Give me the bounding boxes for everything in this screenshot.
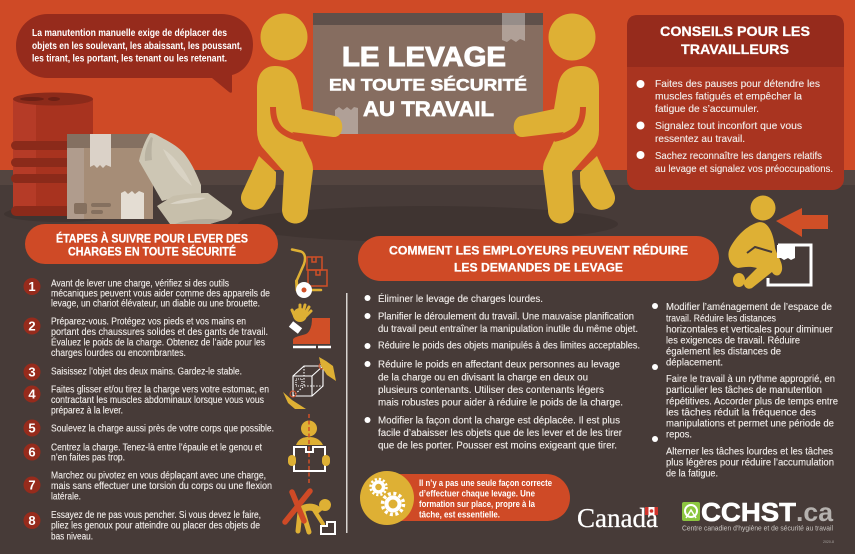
step 1: [24, 278, 270, 310]
employer measures: middle column: Modifier la façon dont la charge est déplacée. Il est plus: [378, 416, 620, 426]
employer measures: right column: Modifier l’aménagement de l’espace de: [666, 302, 832, 313]
section heading: safe lifting steps: ÉTAPES À SUIVRE POUR LEVER DES: [56, 232, 248, 246]
icon: gears: [370, 479, 404, 514]
intro speech bubble: [16, 14, 253, 93]
step 5: [24, 420, 274, 436]
intro speech bubble: les tirant, les portant, les tenant ou les retenant.: [32, 54, 227, 64]
step 5: Soulevez la charge aussi près de votre corps que possible.: [51, 424, 274, 434]
steps list: [24, 278, 274, 542]
title: [329, 41, 527, 121]
step 3: Saisissez l’objet des deux mains. Gardez-le stable.: [51, 366, 242, 378]
icon: do not bend: [285, 491, 335, 534]
callout: on-site training: tâche, est essentielle.: [419, 510, 500, 520]
logo: CCHST: Centre canadien d’hygiène et de sécurité au travail: [682, 524, 833, 532]
section heading: safe lifting steps: [25, 224, 278, 264]
step 6: n’en faites pas trop.: [51, 452, 125, 464]
panel: worker tips: Sachez reconnaître les dangers relatifs: [655, 151, 822, 162]
section heading: employers: [358, 236, 719, 281]
icon: sacks: [139, 133, 232, 224]
logo: Canada wordmark: Canada: [577, 503, 658, 533]
icon: box with two hands: [283, 357, 336, 409]
employer measures: middle column: du travail peut entraîner la manipulation inutile du même objet.: [378, 324, 638, 335]
callout: on-site training: formation sur place, propre à la: [419, 499, 536, 509]
panel: worker tips: [627, 15, 844, 190]
step 7: latérale.: [51, 492, 81, 502]
step 3: 3: [28, 364, 36, 380]
employer measures: middle column: Éliminer le levage de charges lourdes.: [378, 292, 543, 305]
step 8: 8: [28, 513, 36, 528]
step 4: [24, 384, 269, 416]
employer measures: right column: manipulations et permet une période de: [666, 418, 834, 430]
figure: right worker: [514, 14, 615, 224]
employer measures: right column: les tâches réduit la fréquence des: [666, 408, 816, 418]
step 1: levage, un chariot élévateur, un diable ou une brouette.: [51, 298, 260, 310]
step 1: Avant de lever une charge, vérifiez si des outils: [51, 278, 229, 290]
section heading: employers: LES DEMANDES DE LEVAGE: [454, 260, 623, 274]
panel: worker tips: fatigue de s’accumuler.: [655, 104, 759, 115]
figure: left worker: [241, 14, 342, 224]
icon: red barrel: [11, 92, 95, 216]
logo: CCHST: [682, 497, 834, 532]
employer measures: middle column: Planifier le déroulement du travail. Une mauvaise planification: [378, 312, 634, 322]
intro speech bubble: La manutention manuelle exige de déplacer des: [32, 28, 227, 39]
step 7: 7: [28, 478, 36, 492]
step 8: bas niveau.: [51, 532, 93, 542]
step 6: Centrez la charge. Tenez-là entre l’épaule et le genou et: [51, 442, 262, 454]
employer measures: middle column: [364, 292, 640, 452]
icon: hand truck: [292, 250, 327, 298]
employer measures: middle column: plusieurs contenants. Utiliser des contenants légers: [378, 385, 604, 396]
tape strips: [335, 13, 525, 134]
section heading: safe lifting steps: CHARGES EN TOUTE SÉCURITÉ: [68, 246, 236, 258]
logo: CCHST: CCHST: [701, 497, 796, 527]
icon: cardboard box: [67, 134, 153, 219]
employer measures: middle column: Réduire le poids en affectant deux personnes au levage: [378, 360, 620, 370]
step 4: 4: [28, 386, 36, 402]
callout: on-site training: [360, 471, 570, 525]
title: LE LEVAGE: [342, 41, 506, 72]
step 6: 6: [28, 444, 36, 460]
employer measures: right column: repos.: [666, 430, 692, 440]
employer measures: right column: déplacement.: [666, 358, 723, 368]
panel: worker tips: muscles fatigués et empêcher la: [655, 92, 802, 102]
step 8: Essayez de ne pas vous pencher. Si vous devez le faire,: [51, 510, 261, 521]
employer measures: right column: répétitives. Accorder plus de temps entre: [666, 396, 838, 408]
step 4: contractant les muscles abdominaux lorsque vous vous: [51, 395, 264, 406]
callout: on-site training: d’effectuer chaque levage. Une: [419, 488, 535, 498]
employer measures: right column: les exigences de travail. Réduire: [666, 336, 800, 346]
title: EN TOUTE SÉCURITÉ: [329, 76, 527, 94]
callout: on-site training: Il n’y a pas une seule façon correcte: [419, 478, 552, 488]
title: AU TRAVAIL: [363, 97, 494, 121]
icon: crouching worker with arrow: [728, 196, 828, 289]
step 1: mécaniques peuvent vous aider comme des appareils de: [51, 288, 270, 300]
step 7: Marchez ou pivotez en vous déplaçant avec une charge,: [51, 470, 266, 482]
large box with title: [313, 13, 543, 134]
step 2: 2: [28, 318, 36, 334]
employer measures: right column: plus légères pour réduire l’accumulation: [666, 458, 834, 468]
panel: worker tips: ressentez au travail.: [655, 134, 745, 145]
employer measures: right column: également les distances de: [666, 346, 781, 358]
step 2: Évaluez le poids de la charge. Obtenez de l’aide pour les: [51, 336, 265, 348]
step 2: charges lourdes ou encombrantes.: [51, 348, 186, 359]
icon: glove and boot: [291, 305, 331, 347]
employer measures: right column: particulier les tâches de manutention: [666, 385, 822, 396]
logo: CCHST: .ca: [796, 497, 834, 527]
step 8: pliez les genoux pour atteindre ou placer des objets de: [51, 520, 260, 532]
step 1: 1: [28, 279, 36, 294]
step 2: Préparez-vous. Protégez vos pieds et vos mains en: [51, 316, 246, 328]
step 7: [24, 470, 272, 502]
step 2: [24, 316, 268, 359]
employer measures: middle column: que de les porter. Pousser est moins exigeant que tirer.: [378, 440, 617, 452]
document code: 2020-8: [823, 540, 834, 544]
employer measures: right column: Faire le travail à un rythme approprié, en: [666, 374, 835, 385]
employer measures: middle column: facile d’abaisser les objets que de les lever et de les tirer: [378, 428, 623, 439]
employer measures: right column: Alterner les tâches lourdes et les tâches: [666, 446, 833, 458]
step 6: [24, 442, 262, 464]
employer measures: middle column: Réduire le poids des objets manipulés à des limites acceptables.: [378, 340, 640, 352]
employer measures: middle column: de la charge ou en divisant la charge en deux ou: [378, 372, 588, 384]
employer measures: right column: de la fatigue.: [666, 468, 718, 480]
panel: worker tips: TRAVAILLEURS: [681, 42, 789, 57]
panel: worker tips: Faites des pauses pour détendre les: [655, 79, 820, 90]
step 8: [24, 510, 261, 542]
employer measures: middle column: mais robustes pour aider à réduire le poids de la charge.: [378, 398, 623, 408]
intro speech bubble: objets en les soulevant, les abaissant, les poussant,: [32, 41, 242, 52]
employer measures: right column: [652, 302, 838, 480]
step 2: portant des chaussures solides et des gants de travail.: [51, 327, 268, 338]
step 4: préparez à la lever.: [51, 406, 123, 416]
step 5: 5: [28, 420, 36, 436]
employer measures: right column: travail. Réduire les distances: [666, 314, 776, 324]
panel: worker tips: CONSEILS POUR LES: [660, 24, 810, 39]
step 4: Faites glisser et/ou tirez la charge vers votre estomac, en: [51, 384, 269, 396]
panel: worker tips: Signalez tout inconfort que vous: [655, 121, 802, 132]
section heading: employers: COMMENT LES EMPLOYEURS PEUVENT RÉDUIRE: [389, 242, 688, 258]
icon: centered load: [288, 414, 330, 483]
panel: worker tips: au levage et signalez vos préoccupations.: [655, 164, 833, 175]
employer measures: right column: horizontales et verticales pour diminuer: [666, 324, 833, 336]
step 3: [24, 364, 242, 380]
step 7: mais sans effectuer une torsion du corps ou une flexion: [51, 481, 272, 492]
